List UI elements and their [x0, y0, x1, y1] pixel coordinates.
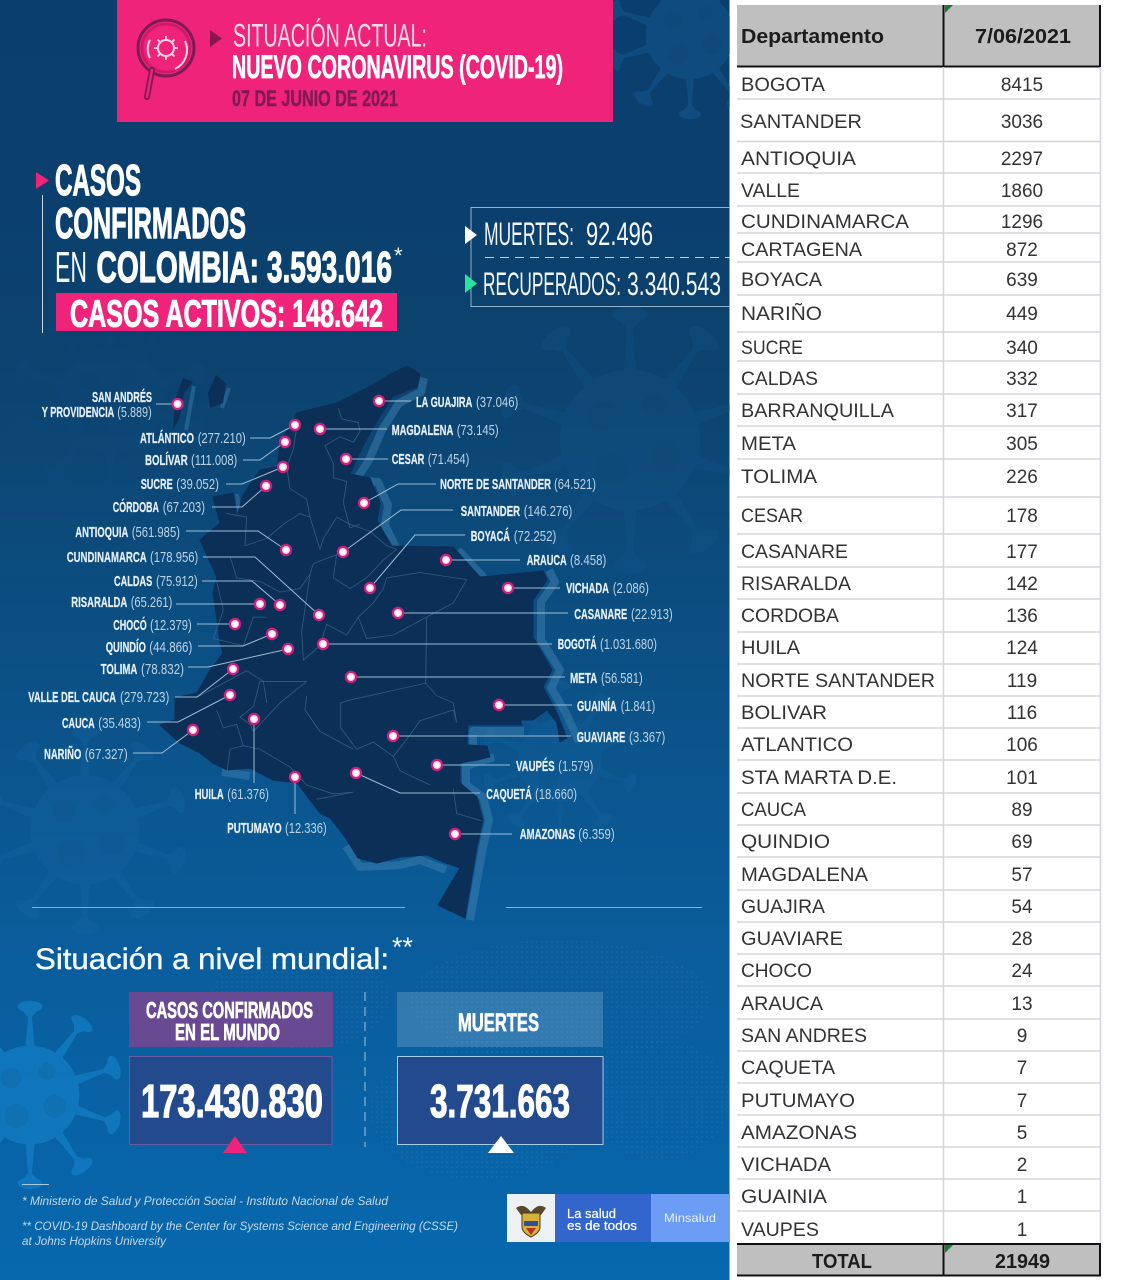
table rows: CORDOBA [741, 606, 839, 627]
table rows: 226 [1006, 467, 1038, 488]
table rows: 1 [1017, 1220, 1027, 1241]
callout: Nariño [44, 724, 199, 763]
table rows: BOYACA [741, 270, 822, 291]
callout: Bogotá: (1.031.680) [600, 636, 657, 653]
table rows: 106 [1006, 735, 1038, 756]
callout: Cesar: CESAR [392, 451, 424, 468]
callout: Arauca: ARAUCA [527, 552, 567, 569]
callout: Meta: (56.581) [601, 670, 643, 687]
table rows: 89 [1011, 800, 1033, 821]
muertes title box: MUERTES [458, 1009, 539, 1037]
callout: Santander: (146.276) [524, 503, 572, 520]
table rows: 449 [1006, 304, 1038, 325]
logo: Minsalud: es de todos [567, 1218, 638, 1233]
callout: San Andrés: Y PROVIDENCIA [42, 404, 114, 421]
table rows: 69 [1011, 832, 1033, 853]
callout: Casanare: CASANARE [574, 606, 627, 623]
callout: Caldas [114, 573, 286, 611]
heading: en colombia total: COLOMBIA: 3.593.016 [96, 243, 392, 292]
table rows: 142 [1006, 574, 1038, 595]
callout: Nariño: NARIÑO [44, 745, 82, 763]
callout: Córdoba: CÓRDOBA [113, 498, 159, 516]
table header: Departamento [741, 26, 884, 48]
callout: Caquetá: (18.660) [535, 786, 577, 803]
table rows: HUILA [741, 638, 800, 659]
callout: La Guajira: (37.046) [476, 394, 518, 411]
callout: Cesar [340, 451, 469, 468]
table rows: VAUPES [741, 1220, 819, 1241]
footnotes [22, 1194, 458, 1248]
callout: Caquetá [350, 767, 577, 803]
callout: San Andrés: (5.889) [117, 404, 152, 421]
callout: Arauca [440, 552, 606, 569]
table rows: 7 [1017, 1058, 1027, 1079]
header banner [117, 0, 613, 122]
callout: Huila: HUILA [195, 786, 224, 803]
table rows: VICHADA [741, 1155, 831, 1176]
callout: Vichada: (2.086) [613, 580, 649, 597]
heading: confirmados: CONFIRMADOS [55, 199, 246, 248]
callout: Tolima: (78.832) [141, 661, 184, 678]
callout: Huila [195, 713, 269, 803]
table rows: 2 [1017, 1155, 1027, 1176]
callout: Huila: (61.376) [227, 786, 269, 803]
table rows: NARIÑO [741, 303, 822, 325]
heading: casos: CASOS [55, 156, 141, 205]
icon: header arrow [210, 30, 222, 47]
callout: Cesar: (71.454) [428, 451, 469, 468]
heading: situación mundial: ** [392, 932, 413, 962]
table total row: 21949 [995, 1251, 1050, 1273]
callout: Vaupés: VAUPÉS [516, 758, 555, 775]
table rows: 101 [1006, 768, 1038, 789]
table rows: 54 [1011, 897, 1033, 918]
callout: Bolívar: (111.008) [191, 452, 237, 469]
callout: Cauca: CAUCA [62, 715, 95, 732]
callout: Magdalena: MAGDALENA [392, 422, 453, 439]
panel: muertes en el mundo [397, 992, 603, 1153]
callout: Boyacá: (72.252) [514, 528, 556, 545]
heading: en colombia total: EN [55, 243, 87, 292]
heading: situación mundial: Situación a nivel mundial: [35, 943, 389, 976]
table rows: 8415 [1001, 75, 1043, 96]
muertes figure: MUERTES: [484, 216, 574, 252]
callout: Meta: META [570, 670, 597, 687]
table rows: 2297 [1001, 149, 1043, 170]
callout: Cundinamarca [67, 549, 325, 621]
table rows: 332 [1006, 369, 1038, 390]
virus background decoration [0, 0, 773, 1189]
table rows: 136 [1006, 606, 1038, 627]
callout: Vichada [502, 580, 649, 597]
table rows: 317 [1006, 401, 1038, 422]
table: casos por departamento [730, 0, 1128, 1280]
casos activos badge: CASOS ACTIVOS: 148.642 [70, 294, 383, 336]
table rows: PUTUMAYO [741, 1091, 855, 1112]
table rows: ANTIOQUIA [741, 149, 856, 170]
callout: Magdalena [314, 422, 499, 439]
icon: white up triangle [488, 1136, 514, 1153]
table rows: CASANARE [741, 542, 848, 563]
table rows: 28 [1011, 929, 1033, 950]
table rows: 1860 [1001, 181, 1043, 202]
table header: 7/06/2021 [975, 26, 1071, 48]
callout: Risaralda: (65.261) [131, 594, 172, 611]
header line 2: NUEVO CORONAVIRUS (COVID-19) [232, 49, 563, 85]
table rows: 177 [1006, 542, 1038, 563]
table rows: AMAZONAS [741, 1123, 857, 1144]
table rows: 305 [1006, 434, 1038, 455]
callout: Santander [337, 503, 572, 558]
callout: Putumayo [227, 771, 327, 837]
icon: green arrow [465, 274, 477, 293]
table rows: 340 [1006, 338, 1038, 359]
heading: en colombia total [55, 243, 403, 292]
table rows: 5 [1017, 1123, 1027, 1144]
table rows: BOLIVAR [741, 703, 827, 724]
table rows: CAQUETA [741, 1058, 835, 1079]
callout: Sucre [141, 461, 289, 493]
callout: Quindío [106, 628, 278, 656]
callout: Antioquia: ANTIOQUIA [75, 524, 128, 541]
callout: Norte de Santander [358, 476, 596, 509]
table rows: SAN ANDRES [741, 1026, 867, 1047]
logo: Minsalud [507, 1194, 730, 1242]
callout: La Guajira: LA GUAJIRA [416, 394, 472, 411]
callout: Vaupés: (1.579) [558, 758, 593, 775]
icon: magnifier with virus [138, 20, 194, 97]
panel: casos confirmados en el mundo [129, 992, 333, 1153]
table rows: 116 [1007, 703, 1037, 724]
callout: Meta [345, 670, 643, 687]
footnotes: ** COVID-19 Dashboard by the Center for Systems Science and Engineering (CSSE) [22, 1219, 458, 1233]
callout: Vichada: VICHADA [566, 580, 609, 597]
table rows: GUAJIRA [741, 897, 825, 918]
table rows: GUAVIARE [741, 929, 843, 950]
callout: Antioquia [75, 524, 292, 556]
callout: Cauca [62, 689, 236, 732]
table rows: BOGOTA [741, 75, 825, 96]
footnotes: * Ministerio de Salud y Protección Social - Instituto Nacional de Salud [22, 1194, 388, 1208]
table rows: NORTE SANTANDER [741, 671, 935, 692]
table rows: TOLIMA [741, 467, 817, 488]
table rows: META [741, 434, 796, 455]
world deaths number: 3.731.663 [430, 1075, 570, 1127]
table rows: CESAR [741, 506, 803, 527]
table rows: 119 [1007, 671, 1037, 692]
infographic background panel [0, 0, 730, 1280]
table total row: TOTAL [812, 1251, 872, 1273]
table rows: 124 [1006, 638, 1038, 659]
callout: Valle del Cauca [28, 663, 239, 706]
callout: Valle del Cauca: VALLE DEL CAUCA [28, 689, 116, 706]
callout: Amazonas: (6.359) [578, 826, 615, 843]
recuperados figure: 3.340.543 [627, 266, 721, 302]
header date: 07 DE JUNIO DE 2021 [232, 86, 398, 111]
callout: Córdoba: (67.203) [163, 499, 205, 516]
header line 1: SITUACIÓN ACTUAL: [233, 18, 427, 54]
callout: Chocó: (12.379) [150, 617, 192, 634]
recuperados figure: RECUPERADOS: [483, 266, 621, 302]
callout: Cundinamarca: (178.956) [150, 549, 198, 566]
world deaths number [398, 1056, 603, 1144]
callout: Atlántico: (277.210) [198, 430, 246, 447]
icon: pink arrow [36, 172, 49, 189]
callout: Boyacá: BOYACÁ [471, 528, 510, 545]
callout: La Guajira [373, 394, 518, 411]
callout: Sucre: SUCRE [141, 476, 173, 493]
table rows: VALLE [741, 181, 800, 202]
callout: Guaviare: GUAVIARE [577, 729, 625, 746]
table rows: 1296 [1001, 212, 1043, 233]
icon: coat of arms [516, 1206, 546, 1237]
table header [737, 5, 1101, 67]
callout: Amazonas [449, 826, 615, 843]
callout: Cauca: (35.483) [98, 715, 141, 732]
table rows: BARRANQUILLA [741, 401, 894, 422]
purple title box: EN EL MUNDO [175, 1019, 280, 1045]
callout: Atlántico [140, 419, 301, 447]
table rows: 9 [1017, 1026, 1027, 1047]
callout: Casanare: (22.913) [631, 606, 673, 623]
table rows: RISARALDA [741, 574, 851, 595]
table total row [737, 1244, 1101, 1276]
callout: Norte de Santander: NORTE DE SANTANDER [440, 476, 551, 493]
map of Colombia [160, 366, 579, 920]
table rows: STA MARTA D.E. [741, 768, 897, 789]
callout: Guainía: GUAINÍA [577, 698, 617, 715]
table rows: QUINDIO [741, 832, 830, 853]
muertes figure: 92.496 [586, 216, 653, 252]
callout: Boyacá [364, 528, 556, 594]
callout: Norte de Santander: (64.521) [554, 476, 596, 493]
table rows [740, 75, 1043, 1241]
callout: Sucre: (39.052) [176, 476, 219, 493]
table rows: 639 [1006, 270, 1038, 291]
purple title box: CASOS CONFIRMADOS [146, 997, 313, 1023]
logo: Minsalud: La salud [567, 1206, 616, 1221]
callout: Risaralda [71, 594, 266, 611]
table rows: 13 [1011, 994, 1033, 1015]
callout: Risaralda: RISARALDA [71, 594, 127, 611]
table rows: 24 [1011, 961, 1033, 982]
callout: Guainía: (1.841) [621, 698, 655, 715]
table rows: CHOCO [741, 961, 812, 982]
table rows: 178 [1006, 506, 1038, 527]
table rows: 3036 [1001, 112, 1043, 133]
callout: Valle del Cauca: (279.723) [120, 689, 169, 706]
callout: Caquetá: CAQUETÁ [486, 786, 532, 803]
callout: Putumayo: PUTUMAYO [227, 820, 282, 837]
callout: Guaviare [387, 729, 665, 746]
callout: Vaupés [431, 758, 593, 775]
dotted world map decoration [210, 940, 730, 1180]
world cases number [130, 1056, 332, 1144]
callout: San Andrés: SAN ANDRÉS [92, 389, 152, 406]
icon: pink up triangle [223, 1136, 247, 1153]
callout: Quindío: (44.866) [149, 639, 192, 656]
logo: Minsalud: Minsalud [664, 1211, 716, 1225]
callout: Tolima: TOLIMA [101, 661, 137, 678]
callout: Bolívar [145, 436, 291, 469]
purple title box [129, 992, 333, 1047]
callout: Bogotá [317, 636, 657, 653]
callout: Cundinamarca: CUNDINAMARCA [67, 549, 147, 566]
callout: Chocó: CHOCÓ [113, 616, 147, 634]
callout: Guainía [493, 698, 655, 715]
callout: Casanare [392, 606, 673, 623]
callout: Caldas: CALDAS [114, 573, 152, 590]
icon: white arrow [465, 226, 477, 244]
callout: Putumayo: (12.336) [285, 820, 327, 837]
table rows: SANTANDER [740, 112, 862, 133]
table rows: ARAUCA [741, 994, 823, 1015]
table rows: ATLANTICO [741, 735, 853, 756]
callout: Guaviare: (3.367) [629, 729, 665, 746]
callout: Chocó [113, 616, 241, 634]
table rows: SUCRE [741, 338, 803, 359]
callout: Antioquia: (561.985) [132, 524, 180, 541]
panel: casos confirmados [36, 156, 403, 336]
casos activos badge [56, 293, 397, 336]
callout: Bolívar: BOLÍVAR [145, 452, 188, 469]
footnotes: at Johns Hopkins University [22, 1234, 167, 1248]
callout: Tolima [101, 643, 294, 678]
callout: San Andrés [42, 389, 184, 421]
callout: Caldas: (75.912) [156, 573, 198, 590]
callout: Nariño: (67.327) [85, 746, 128, 763]
callout: Arauca: (8.458) [570, 552, 606, 569]
callout: Santander: SANTANDER [461, 503, 520, 520]
table rows: MAGDALENA [741, 865, 868, 886]
table rows: 1 [1017, 1187, 1027, 1208]
callout: Atlántico: ATLÁNTICO [140, 430, 194, 447]
callout: Magdalena: (73.145) [457, 422, 499, 439]
heading: situación mundial [35, 932, 413, 976]
table rows: CALDAS [741, 369, 818, 390]
table rows: CARTAGENA [741, 240, 862, 261]
table rows: 57 [1011, 865, 1033, 886]
table rows: GUAINIA [741, 1187, 827, 1208]
table rows: CAUCA [741, 800, 806, 821]
callout: Amazonas: AMAZONAS [520, 826, 575, 843]
table rows: CUNDINAMARCA [741, 212, 909, 233]
callout: Córdoba [113, 480, 272, 516]
panel: muertes y recuperados [465, 208, 730, 306]
heading: en colombia total: * [394, 243, 403, 268]
table rows: 7 [1017, 1091, 1027, 1112]
world cases number: 173.430.830 [141, 1075, 323, 1127]
table rows: 872 [1006, 240, 1038, 261]
callout: Bogotá: BOGOTÁ [558, 636, 597, 653]
muertes title box [397, 992, 603, 1047]
callout: Quindío: QUINDÍO [106, 639, 146, 656]
